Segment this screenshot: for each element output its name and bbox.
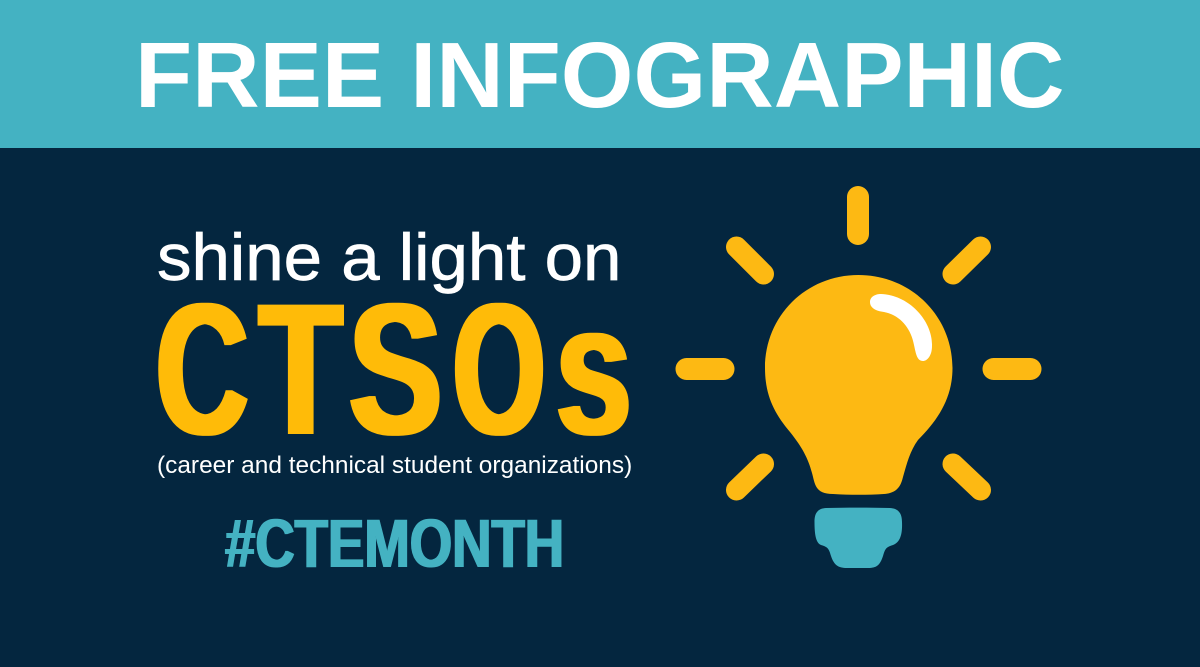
tagline: shine a light on: [157, 220, 621, 294]
icon: light bulb: [686, 197, 1030, 568]
CTSOs heading: C: [156, 264, 248, 474]
banner title: FREE INFOGRAPHIC: [135, 23, 1064, 127]
CTSOs heading: S: [349, 264, 442, 474]
bulb glass: [765, 275, 952, 495]
CTSOs heading: s: [556, 264, 631, 474]
bulb highlight: [870, 294, 932, 361]
definition text: (career and technical student organizations): [157, 452, 632, 479]
CTSOs heading: O: [453, 264, 545, 474]
rays: [686, 197, 1030, 490]
hashtag: #CTEMONTH: [224, 505, 564, 582]
CTSOs heading: T: [259, 264, 342, 474]
header banner: [0, 0, 1200, 148]
bulb base: [814, 508, 902, 568]
CTSOs heading: [156, 264, 631, 474]
